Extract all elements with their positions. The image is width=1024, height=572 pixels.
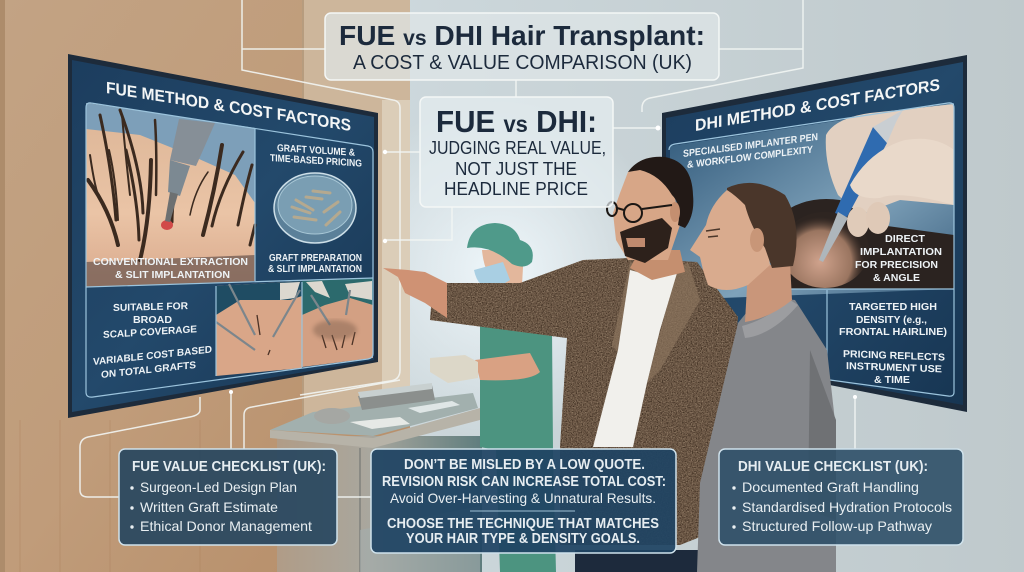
recommendation text [387,516,659,547]
heading: DHI method: DHI METHOD & COST FACTORS [695,75,940,135]
photo: implantation tools [216,278,373,376]
recommendation text: CHOOSE THE TECHNIQUE THAT MATCHES [387,516,659,532]
connector lines [80,0,857,497]
warning text: REVISION RISK CAN INCREASE TOTAL COST: [382,474,666,490]
captions: DHI: DENSITY (e.g., [856,315,927,326]
caption: graft volume: & SLIT IMPLANTATION [268,264,362,275]
photo: direct implantation [780,104,954,289]
heading: FUE vs DHI Hair Transplant: [339,20,705,51]
title box [325,13,719,80]
caption: graft volume [93,143,362,381]
checklist items [130,479,312,534]
pointing hand [383,268,447,318]
message text: JUDGING REAL VALUE, [429,137,606,158]
photo: graft dish panel [274,173,356,243]
heading: FUE vs DHI: [436,104,597,139]
caption: graft volume: TIME-BASED PRICING [270,153,362,170]
steel instrument table [270,383,482,572]
beard [620,218,672,263]
recommendation text: YOUR HAIR TYPE & DENSITY GOALS. [406,531,640,547]
message text: NOT JUST THE [455,158,577,179]
caption: graft volume: BROAD [133,315,172,326]
heading: DHI VALUE CHECKLIST (UK): [738,459,928,475]
captions: DHI [683,132,947,386]
glasses [607,202,672,222]
checklist items: Documented Graft Handling [742,479,919,495]
checklist items: Surgeon-Led Design Plan [140,479,297,495]
warning text: Avoid Over-Harvesting & Unnatural Results. [390,490,656,506]
figure: nurse [430,223,556,572]
caption: graft volume: SUITABLE FOR [113,301,189,314]
checklist items: Written Graft Estimate [140,499,278,515]
bowl [314,408,350,424]
warning text [382,457,666,506]
t-shirt [593,270,677,447]
captions: DHI: & WORKFLOW COMPLEXITY [687,145,813,171]
panel: FUE method monitor [68,54,378,418]
captions: DHI: TARGETED HIGH [849,302,937,313]
caption: graft volume: SCALP COVERAGE [103,324,197,341]
caption: graft volume: & SLIT IMPLANTATION [115,270,230,281]
jacket [430,258,738,545]
neck and face [630,250,685,280]
checklist items: Standardised Hydration Protocols [742,499,952,515]
message text: HEADLINE PRICE [444,178,588,199]
checklist items: Ethical Donor Management [140,518,312,534]
captions: DHI: PRICING REFLECTS [843,349,945,364]
trousers [575,550,700,572]
message box: judging real value [420,97,613,207]
panel: FUE value checklist [119,449,337,545]
figure: man in grey sweater [690,183,836,572]
captions: DHI: SPECIALISED IMPLANTER PEN [683,132,818,160]
lapels [612,262,700,383]
checklist items [732,479,952,534]
warning text: DON’T BE MISLED BY A LOW QUOTE. [404,457,645,473]
caption: graft volume: CONVENTIONAL EXTRACTION [93,257,248,268]
captions: DHI: & ANGLE [873,273,920,284]
captions: DHI: DIRECT [885,234,925,245]
panel: DHI value checklist [719,449,963,545]
hair [628,157,693,228]
caption: graft volume: GRAFT VOLUME & [277,143,355,159]
panel borders [86,103,373,397]
captions: DHI: IMPLANTATION [860,247,942,258]
captions: DHI: & TIME [874,375,910,386]
panel: DHI method monitor [662,55,967,412]
caption: graft volume: GRAFT PREPARATION [269,253,362,264]
captions: DHI: INSTRUMENT USE [846,361,942,375]
caption: graft volume: ON TOTAL GRAFTS [101,360,196,381]
tool [170,119,215,166]
panel: central warning [371,449,676,553]
captions: DHI: FOR PRECISION [855,260,938,271]
checklist items: Structured Follow-up Pathway [742,518,932,534]
message text [429,137,606,199]
subheading: A COST & VALUE COMPARISON (UK) [353,51,692,74]
captions: DHI: FRONTAL HAIRLINE) [839,327,947,338]
heading: FUE method: FUE METHOD & COST FACTORS [106,78,351,135]
panel borders [669,103,954,396]
tray [358,383,435,410]
heading: FUE VALUE CHECKLIST (UK): [132,459,326,475]
photo: extraction on scalp [86,103,255,287]
caption: graft volume: VARIABLE COST BASED [93,345,212,368]
figure: man in tweed jacket pointing [383,157,738,572]
